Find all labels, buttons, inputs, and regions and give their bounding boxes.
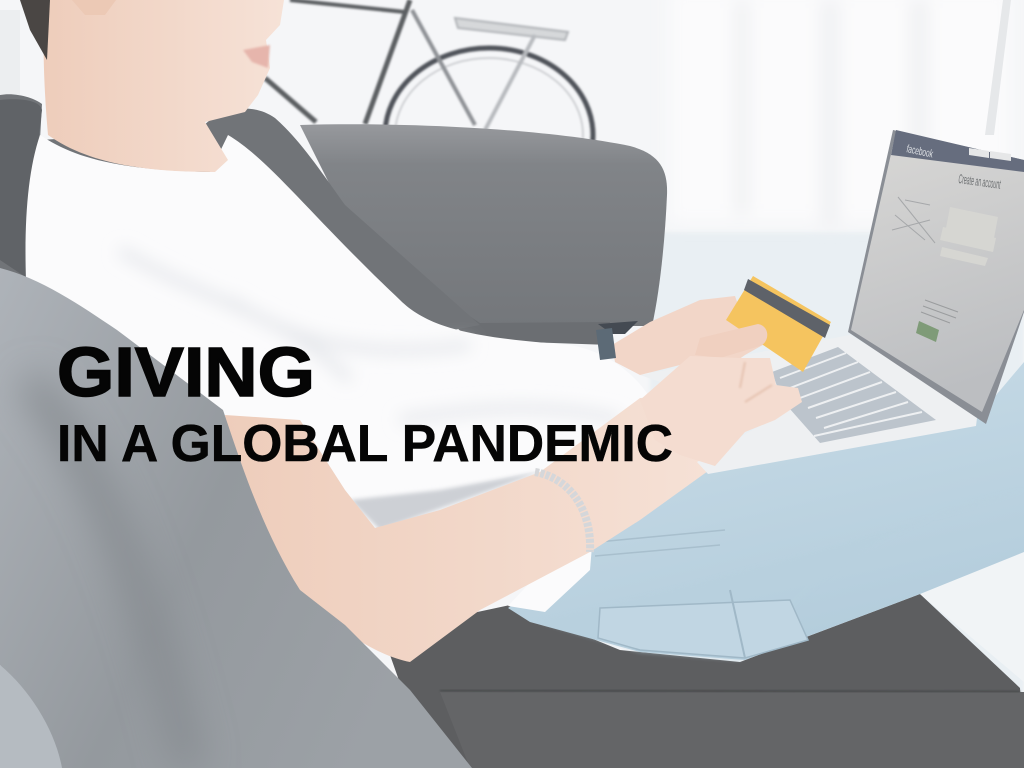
lower hand bbox=[640, 356, 802, 466]
sofa base behind shirt bbox=[390, 265, 610, 345]
credit card bbox=[726, 276, 831, 372]
arm bbox=[225, 395, 730, 662]
floor right of seat bbox=[920, 552, 1024, 682]
smart watch bbox=[596, 321, 638, 360]
hair bbox=[20, 0, 50, 60]
backrest cushion bbox=[0, 94, 480, 340]
ear bbox=[72, 0, 116, 15]
sofa arm bbox=[300, 124, 667, 326]
upper hand bbox=[612, 296, 768, 375]
bracelet bbox=[535, 472, 590, 552]
sofa seat bbox=[390, 594, 1024, 768]
curtains bbox=[670, 0, 1010, 225]
laptop bbox=[640, 130, 1024, 474]
screen content bbox=[892, 143, 1011, 342]
screen content: facebook bbox=[905, 143, 935, 160]
screen content: Create an account bbox=[957, 173, 1002, 193]
thumb over card bbox=[695, 324, 767, 358]
t-shirt bbox=[26, 135, 652, 612]
blanket foreground bbox=[0, 268, 472, 768]
screen bbox=[848, 130, 1024, 424]
keyboard bbox=[772, 347, 936, 443]
title line: GIVING: GIVING bbox=[57, 333, 315, 411]
neck and face bbox=[20, 0, 284, 172]
laptop base bbox=[640, 335, 978, 474]
jeans bbox=[508, 362, 1024, 660]
title bbox=[57, 333, 673, 473]
lips bbox=[243, 45, 270, 68]
bicycle bbox=[265, 0, 593, 222]
title line: IN A GLOBAL PANDEMIC: IN A GLOBAL PANDEMIC bbox=[57, 415, 673, 473]
